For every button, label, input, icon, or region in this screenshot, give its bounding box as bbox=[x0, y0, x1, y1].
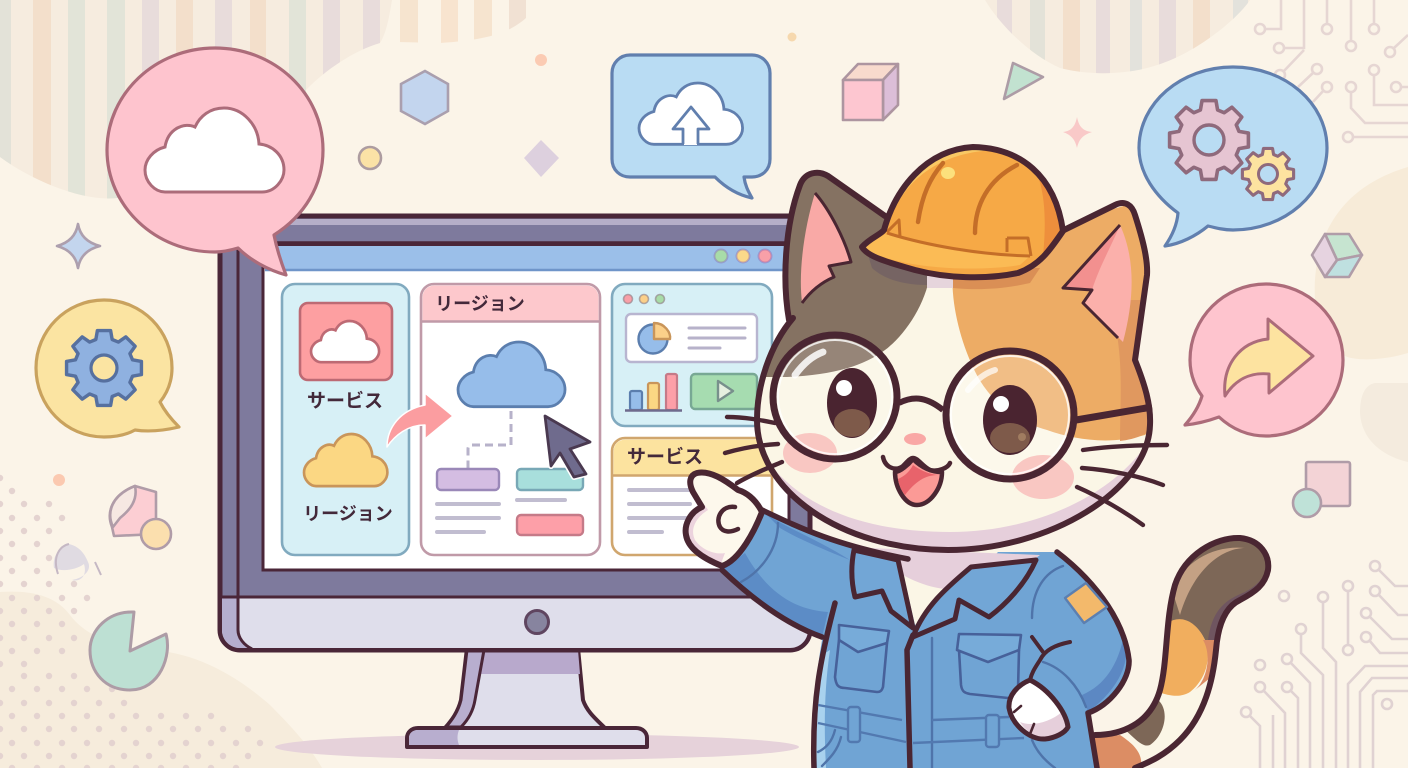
glass lens tint bbox=[773, 335, 1074, 479]
square and circle bbox=[1293, 462, 1350, 517]
stand bbox=[445, 648, 605, 728]
icon: blue gear bbox=[67, 331, 141, 405]
blue cloud bbox=[458, 342, 565, 407]
title bar bbox=[265, 246, 788, 270]
icon: cloud bbox=[145, 108, 284, 192]
diamond bbox=[524, 140, 559, 177]
bar chart bbox=[625, 374, 682, 410]
base bbox=[407, 728, 647, 747]
arm bbox=[1076, 407, 1152, 420]
tail bbox=[1090, 530, 1280, 768]
left lens rim bbox=[773, 335, 897, 459]
pie shape bbox=[90, 612, 168, 690]
text lines bbox=[629, 490, 690, 532]
purple box bbox=[437, 469, 499, 490]
dashed connector bbox=[468, 411, 511, 468]
orange shade bbox=[1118, 300, 1147, 441]
tail orange band bbox=[1158, 619, 1208, 696]
speech bubble: cloud upload bbox=[612, 55, 770, 198]
face cream bbox=[760, 206, 1146, 532]
right lens rim bbox=[946, 351, 1074, 479]
left pocket bbox=[835, 625, 889, 692]
blue sparkle bbox=[57, 224, 100, 268]
panel: dashboard bbox=[612, 284, 772, 426]
icon: arrow bbox=[1225, 319, 1313, 396]
pointing hand bbox=[686, 472, 762, 566]
lens highlights bbox=[795, 352, 823, 375]
teal box bbox=[517, 469, 583, 490]
panel: region bbox=[421, 284, 600, 555]
small yellow dot bbox=[359, 147, 381, 169]
seams bbox=[741, 523, 1086, 768]
card lines bbox=[689, 328, 745, 348]
pink sparkle bbox=[1063, 117, 1092, 148]
sleeve shade bbox=[722, 553, 828, 637]
bridge bbox=[899, 399, 943, 410]
cursor bbox=[545, 416, 590, 477]
power button bbox=[526, 610, 548, 634]
icon: small gear bbox=[1242, 148, 1294, 200]
side shade bbox=[1082, 635, 1126, 712]
speech bubble: yellow gear bbox=[36, 300, 179, 437]
cheeks bbox=[783, 433, 1074, 499]
glasses bbox=[773, 335, 1152, 479]
window dots bbox=[624, 294, 664, 304]
icon: large gear bbox=[1170, 101, 1248, 179]
right eye bbox=[983, 385, 1037, 455]
tail lower brown bbox=[1125, 700, 1165, 746]
collars bbox=[852, 550, 1036, 637]
screen bbox=[263, 245, 789, 570]
left ear inner bbox=[801, 193, 851, 303]
hexagon bbox=[401, 71, 448, 124]
hat shadow bbox=[869, 258, 927, 285]
ground shadow bbox=[275, 734, 799, 760]
window buttons bbox=[714, 250, 772, 262]
striped blob: top middle bbox=[400, 0, 526, 43]
work jacket bbox=[722, 510, 1129, 768]
text lines bbox=[437, 500, 565, 532]
shoulder patch bbox=[1065, 583, 1107, 623]
right ear inner bbox=[1063, 225, 1132, 342]
soft blob: right lower bbox=[1360, 383, 1408, 462]
header bbox=[422, 286, 598, 321]
neck and chest bbox=[898, 550, 1000, 625]
right pocket bbox=[957, 634, 1021, 698]
soft blob: right upper bbox=[1315, 167, 1408, 359]
service tile bbox=[300, 303, 392, 380]
hex cube bbox=[1312, 234, 1362, 277]
whiskers bbox=[725, 417, 1167, 525]
panel: left sidebar bbox=[282, 284, 409, 555]
panel: service bbox=[612, 438, 772, 555]
outline bbox=[722, 510, 1129, 768]
belt bbox=[818, 705, 1024, 747]
speech bubble: pink cloud bbox=[107, 48, 323, 275]
tail red-orange base bbox=[1090, 735, 1141, 768]
head outline bbox=[757, 173, 1150, 550]
circuit pattern: bottom right bbox=[1241, 561, 1408, 768]
body highlight bbox=[816, 650, 830, 768]
orange dot bbox=[788, 32, 796, 42]
peach dot bbox=[535, 54, 547, 66]
cube bbox=[843, 64, 898, 120]
faded lavender shape bbox=[54, 544, 101, 580]
cat paw: on hip bbox=[1009, 680, 1068, 739]
elbow crease bbox=[1030, 637, 1070, 680]
heading: サービス bbox=[627, 446, 703, 468]
triangle bbox=[1004, 63, 1043, 99]
brown patch bbox=[766, 176, 928, 377]
tail brown tip bbox=[1172, 541, 1266, 640]
label: region: リージョン bbox=[303, 504, 393, 524]
monitor bbox=[220, 216, 810, 747]
screen bezel line bbox=[238, 241, 810, 245]
red box bbox=[517, 515, 583, 535]
chin bbox=[220, 243, 810, 649]
nose bbox=[904, 433, 926, 445]
leaf shape with circle bbox=[110, 486, 171, 549]
icon: cloud with up arrow bbox=[639, 83, 743, 145]
video tile bbox=[691, 374, 757, 409]
card bbox=[626, 314, 757, 362]
speech bubble: gears bbox=[1139, 67, 1327, 246]
peach dot left bbox=[53, 474, 65, 486]
heading: リージョン bbox=[435, 294, 525, 314]
label: service: サービス bbox=[307, 390, 383, 412]
frame bbox=[220, 216, 810, 650]
striped blob: top right bbox=[986, 0, 1250, 74]
decorative shapes bbox=[53, 32, 1362, 690]
hard hat bbox=[860, 146, 1075, 277]
left eye bbox=[827, 368, 877, 438]
cat character bbox=[686, 146, 1280, 768]
speech bubble: share arrow bbox=[1185, 284, 1343, 436]
arrow: service to region bbox=[387, 393, 453, 447]
orange patch bbox=[952, 206, 1146, 440]
pie chart bbox=[638, 323, 670, 354]
striped blob: top left bbox=[0, 0, 400, 210]
header bbox=[614, 440, 770, 475]
soft blob: bottom left bbox=[0, 592, 322, 768]
yellow cloud bbox=[304, 434, 387, 486]
halftone dot pattern bbox=[0, 478, 260, 768]
circuit pattern: top right bbox=[1255, 0, 1408, 142]
tail shade bbox=[1148, 746, 1168, 759]
cat head bbox=[740, 160, 1160, 550]
mouth bbox=[883, 457, 950, 505]
top highlight bbox=[222, 219, 808, 225]
